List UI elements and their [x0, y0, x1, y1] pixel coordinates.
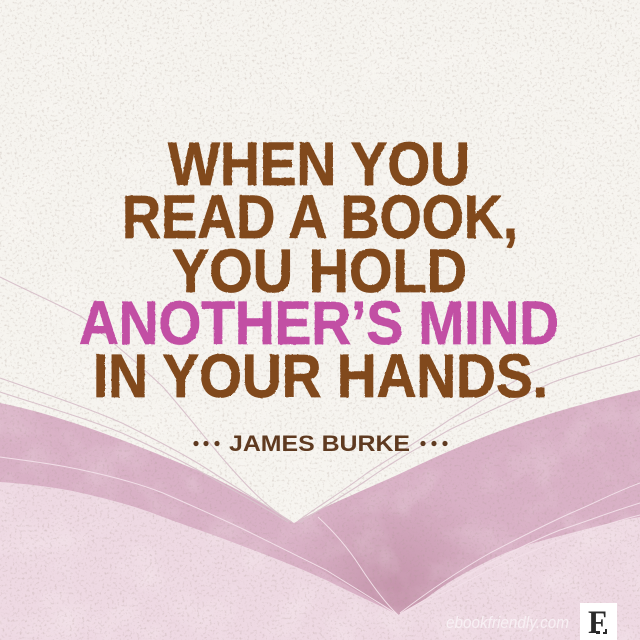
- logo background: [580, 603, 617, 640]
- line 2: READ A BOOK,: [122, 183, 518, 251]
- book: dark pink page edges: [0, 390, 640, 640]
- quote headline: [79, 130, 559, 410]
- book: light pink cover: [0, 482, 640, 640]
- line 1: WHEN YOU: [168, 130, 470, 198]
- spine shading: [270, 470, 520, 620]
- attribution: [193, 431, 448, 456]
- line 5: IN YOUR HANDS.: [93, 342, 548, 410]
- website credit: ebookfriendly.com: [446, 614, 569, 632]
- book: page lines on the pink pages: [0, 457, 640, 615]
- right dots: [420, 441, 448, 446]
- logo corner marks: [596, 629, 607, 634]
- author name: JAMES BURKE: [229, 431, 410, 456]
- left dots: [193, 441, 220, 446]
- line 3: YOU HOLD: [172, 237, 467, 305]
- line 4, highlighted: ANOTHER’S MIND: [79, 289, 559, 357]
- book: page lines on the paper: [0, 277, 640, 522]
- logo badge: [580, 603, 617, 640]
- logo letter: F: [588, 605, 607, 640]
